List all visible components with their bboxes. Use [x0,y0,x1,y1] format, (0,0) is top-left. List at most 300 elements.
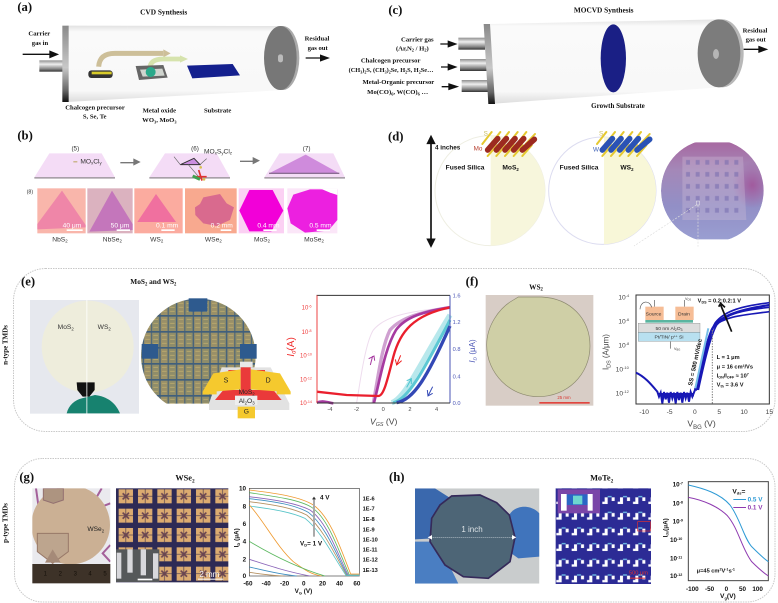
chart: Ids vs Vg: = [741,488,745,495]
label: residual gas out: gas out [308,45,329,52]
label: residual gas out [743,27,768,43]
chart: Id vs Vgs [286,295,450,428]
step 6 substrate: Cl [224,148,230,155]
chart: Ids vs Vg: s [729,568,732,574]
wafer with device array [634,139,772,247]
arrow: carrier gas in [23,51,57,57]
chart: Ids vs Vg: 10 [670,555,677,562]
chart: Id vs Vgs: (V) [383,417,398,427]
step 5 substrate: x [91,161,94,166]
chart: Ids vs Vbg: (A/μm) [602,334,611,360]
label: carrier gas: Carrier gas [401,36,434,43]
wafer photo with ruler: WSe [87,526,102,533]
chart: Ids vs Vbg: th [720,385,724,389]
device array with SEM inset [116,488,228,582]
label: metal-organic precursor: , W(CO) [393,89,418,96]
chart: Ids vs Vg: 0.1 V [748,504,763,511]
chart: Id vs Vg: 8 [243,503,247,510]
step 6 substrate: y [221,151,224,156]
chart: Ids vs Vbg: = 0.2:0.2:1 V [707,299,741,305]
chart: Ids vs Vbg: OFF [727,375,735,379]
chart: Id vs Vg: 10 [239,486,247,493]
chart: Ids vs Vg: 10 [670,537,677,544]
heading: CVD Synthesis: CVD Synthesis [140,7,187,16]
crystal WS2: 0.1 mm [156,222,179,229]
chart: Ids vs Vg: -1 [725,567,729,571]
step 6 substrate: MO [204,148,215,155]
label (c): (c) [388,3,402,17]
wafer labels: MoS [502,165,516,172]
label: carrier gas in [28,30,50,47]
step 6 substrate: z [230,151,232,156]
label: chalcogen precursor [65,105,125,121]
chart: Ids vs Vg: 50 [739,586,747,593]
chart: Id vs Vgs: d [291,350,297,354]
wafer labels: WS [620,165,631,172]
label: metal-organic precursor: Mo(CO) [367,89,391,96]
chart: Id vs Vgs: -14 [307,400,312,404]
wafer photo with glove: 2 [71,326,74,331]
chart: Ids vs Vg: 10 [673,500,680,507]
panel (g): WSe2 [19,470,378,595]
chart: Id vs Vg: 0 [243,573,247,580]
heading: MoS2 and WS2: and WS [147,277,174,286]
chart: Id vs Vgs: -10 [307,353,312,357]
wafer photo with scale bar [486,295,593,406]
chart: Id vs Vg: (V) [302,588,312,595]
chart: Ids vs Vbg: DS [606,360,612,368]
chart: Id vs Vgs: -2 [354,407,359,413]
chart: Ids vs Vbg: V [674,347,676,351]
label: substrate: Substrate [204,107,231,114]
heading: MoS2 and WS2: 2 [145,282,148,287]
chart: Ids vs Vg: -7 [680,482,683,486]
chart: Id vs Vg: 1E-11 [363,548,377,554]
chart: Ids vs Vbg: SS = 580 mV/dec [688,338,704,386]
label: metal oxide: , MoO [156,117,174,124]
right axis labels for chart e: 1.6 [453,293,461,299]
crystal labels: WSe [205,236,219,243]
chart: Ids vs Vbg: I [602,368,611,370]
step 5 substrate [34,145,115,179]
label: chalcogen precursor: 2 [364,69,366,74]
chart: Ids vs Vg: 0.5 V [748,497,763,504]
wafer labels: 2 [631,167,634,172]
chart: Ids vs Vg: 100 [752,586,763,593]
chart: Ids vs Vbg: ON [718,375,724,379]
heading: WSe2: WSe [175,474,192,483]
wafer photo with gloves: 1 inch [461,525,483,534]
wafer photo with ruler: 3 [74,571,78,577]
crystal MoSe2 [287,188,337,233]
heading: MOCVD Synthesis: MOCVD Synthesis [574,6,634,15]
right axis labels for chart e [453,293,478,407]
wafer photo with ruler [31,486,110,583]
chart: Id vs Vgs: (A) [286,337,297,351]
label (f): (f) [466,275,478,289]
chart: Id vs Vgs: V [370,417,376,427]
label (e): (e) [21,275,35,289]
crystal labels: MoSe [304,236,321,243]
chart: Ids vs Vbg: ++ [674,334,678,338]
wafer photo with ruler: 5 [103,571,107,577]
label: chalcogen precursor: Se… [421,67,433,74]
crystal labels: MoS [254,236,268,243]
right axis labels for chart e: 0.8 [453,347,461,353]
heading: MoTe2: MoTe [590,474,611,483]
chart: Ids vs Vbg: -10 [623,365,630,370]
device array with inset [556,488,651,584]
label (a): (a) [17,0,32,14]
wafer photo with ruler: 2 [59,571,63,577]
wafer photo with glove: MoS [58,324,71,331]
chart: Id vs Vg: 40 [336,580,344,587]
tube end disk [264,26,299,90]
label: chalcogen precursor: Chalcogen precursor [361,58,421,65]
transistor schematic: G [244,409,249,416]
label: chalcogen precursor: ) [362,67,364,74]
label: carrier gas: (Ar,N [396,45,412,52]
label: metal-organic precursor [362,79,434,96]
chart: Ids vs Vbg [602,293,773,431]
panel (a): CVD synthesis [17,0,330,124]
crystal labels: NbS [52,236,65,243]
right axis labels for chart e: 1.2 [453,320,461,326]
wafer photo with glove: 2 [108,326,111,331]
side label: n-type TMDs: n-type TMDs [2,325,10,365]
chart: Id vs Vg: 4 [243,539,247,546]
transistor schematic: 2 [252,391,255,396]
chart: Ids vs Vbg: V [685,297,687,301]
tube end flange [62,26,69,102]
label: chalcogen precursor: Chalcogen precursor [65,105,125,112]
label: chalcogen precursor: (CH [349,67,360,74]
chart: Id vs Vg: 4 V [320,494,330,501]
label: metal-organic precursor: 6 [391,91,394,96]
chart: Ids vs Vg: ds [665,530,670,536]
chart: Ids vs Vbg: BG [693,425,702,431]
chart: Id vs Vg: 1E-12 [363,558,378,564]
chart: Ids vs Vbg: V [687,419,693,429]
chart: Ids vs Vbg: V [698,299,701,305]
panel (h): MoTe2 [389,470,768,600]
arrow: 4 inches [428,137,434,246]
chart: Ids vs Vbg: μ = 16 cm²/Vs [717,363,753,370]
device array with inset: 500 μm [629,570,648,576]
label: carrier gas: ) [426,45,429,52]
chart: Ids vs Vbg: 10 [618,294,626,301]
chart: Id vs Vg: 1E-8 [363,517,375,523]
chart: Ids vs Vbg: O [677,326,681,332]
label: chalcogen precursor: S, H [407,67,419,74]
crystal NbS2: 40 μm [63,222,82,229]
crystal MoS2 [239,188,284,233]
chart: Id vs Vgs: 10 [300,378,307,384]
chart: Id vs Vg: = 1 V [307,540,323,547]
panel (d): wafer-scale films [388,130,772,247]
label: metal-organic precursor: Metal-Organic precursor [362,79,434,86]
crystal WSe2: 0.2 mm [211,222,233,229]
label: metal oxide: 3 [174,119,177,124]
lattice atom labels: Mo [474,145,483,152]
chart: Id vs Vg: 1E-6 [363,496,375,502]
crystal NbSe2: 50 μm [111,222,130,229]
chart: Id vs Vgs: -8 [308,329,312,333]
heading: WS2: 2 [541,288,544,293]
chart: Id vs Vgs: -6 [308,305,312,309]
label: chalcogen precursor: S, Se, Te [83,114,107,121]
chart: Ids vs Vbg: Pt/TiN/ p [655,335,674,341]
chart: Id vs Vg: 20 [319,580,327,587]
chart: Ids vs Vbg: 7 [747,373,749,377]
chart: Id vs Vg: -60 [243,580,253,587]
lattice atom labels: S [484,130,488,137]
oxide flow arrow [150,59,180,68]
arrow 2 [240,157,260,164]
step 7 substrate [264,145,345,179]
chart: Id vs Vg: 1E-10 [363,537,378,543]
wafer photo with ruler: 1 [44,571,48,577]
label: carrier gas: 2 [424,48,426,53]
crystal labels: 2 [268,239,271,244]
step 5 substrate: MO [80,158,91,165]
label: growth substrate: Growth Substrate [591,102,645,110]
chart: Ids vs Vg: -50 [705,586,715,593]
chart: Id vs Vgs: 0 [382,407,385,413]
tube end disk [698,19,744,87]
label: carrier gas in: Carrier [28,30,50,37]
step 6 substrate: x [215,151,218,156]
chart: Ids vs Vbg: L = 1 μm [717,355,740,361]
step 6 substrate: (6) [191,145,199,152]
label: carrier gas [396,36,434,53]
MoS2 crystal lattice [482,132,535,156]
right axis labels for chart e: 0.0 [453,401,461,407]
label: chalcogen precursor: 3 [385,69,387,74]
chart: Id vs Vgs: 10 [302,330,308,336]
transistor schematic: S [224,377,229,384]
chart: Id vs Vgs: 10 [300,401,307,407]
chart: Ids vs Vg: 2 [719,567,722,571]
step 6 substrate [149,145,232,181]
chart: Id vs Vg: 1E-9 [363,527,375,533]
crystal labels: WS [150,236,161,243]
chart: Ids vs Vbg: 10 [618,318,626,325]
chart: Ids vs Vg: 10 [670,573,677,580]
label: 4 inches: 4 inches [435,145,461,152]
chart: Ids vs Vbg: 50 nm Al [655,326,675,332]
chart: Ids vs Vbg: 15 [766,409,773,416]
arrow 1 [120,158,141,166]
wafer labels: Fused Silica [560,165,599,172]
chart: Ids vs Vg: V [720,593,724,600]
tube body [67,26,283,102]
wafer labels [446,165,634,172]
chart: Ids vs Vg: g [724,595,727,600]
chart: Id vs Vgs: I [286,354,297,357]
label: carrier gas in: gas in [32,40,49,47]
label (h): (h) [389,470,404,484]
chart: Ids vs Vbg: -4 [626,293,630,298]
chart: Id vs Vg: G [299,590,302,595]
transistor schematic: O [247,398,252,405]
crystal labels: 2 [161,239,164,244]
label: chalcogen precursor: 2 [405,69,407,74]
chart: Ids vs Vg [662,482,768,600]
label: carrier gas: / H [414,45,425,52]
transistor schematic: Al [239,398,245,405]
label: metal oxide: Metal oxide [143,107,176,114]
transistor schematic: 2 [245,400,248,405]
crystal labels: 2 [321,239,324,244]
label (g): (g) [19,470,34,484]
label: chalcogen precursor: Se, H [391,67,405,74]
chart: Id vs Vg: 0 [302,580,306,587]
crystal NbS2 [37,188,86,233]
arrow: residual gas out [744,47,766,52]
chart: Id vs Vg: -40 [262,580,271,587]
chart: Ids vs Vbg: BG [676,348,680,352]
panel (b): growth mechanism and crystals [17,129,345,244]
panel (g) and (h) frame: p-type TMDs [14,458,775,602]
chart: Ids vs Vbg: 10 [618,342,626,349]
chart: Ids vs Vbg: 3 [681,328,683,332]
chart: Ids vs Vbg: Drain [678,312,690,318]
chart: Id vs Vg: V [300,540,304,547]
chart: Ids vs Vbg: 2 [675,328,677,332]
chart: Ids vs Vbg: 10 [616,366,623,373]
label: metal-organic precursor: 6 [418,91,421,96]
chart: Ids vs Vg: V [732,488,737,495]
label: metal oxide [142,107,177,124]
crystal labels: NbSe [103,236,119,243]
wafer labels: Fused Silica [446,165,485,172]
label: metal oxide: WO [142,117,154,124]
chart: Ids vs Vbg: -10 [639,409,649,416]
chart: Id vs Vgs: -4 [327,407,332,413]
chart: Ids vs Vg: -100 [686,586,699,593]
chart: Id vs Vgs: 10 [302,306,308,312]
panel (c): MOCVD synthesis [349,3,768,110]
chart: Id vs Vg: I [234,546,241,547]
chart: Ids vs Vg: V [722,568,726,574]
crystal labels [52,236,324,244]
heading: MoS2 and WS2: MoS [130,277,145,286]
wafer photo with ruler: 2 [102,528,105,533]
crystal labels: 2 [65,239,68,244]
label: chalcogen precursor: 2 [389,69,391,74]
step 6 substrate: S [217,148,222,155]
substrate [187,64,240,78]
label: chalcogen precursor: ) [387,67,389,74]
wafer WS2 [549,137,656,244]
chart: Id vs Vgs: 10 [300,354,307,360]
chart: Ids vs Vbg: -8 [626,341,630,346]
chart: Ids vs Vg: 0 [725,586,729,593]
chart: Ids vs Vbg: -12 [623,389,630,394]
tube end flange [484,24,495,104]
label: carrier gas: 2 [412,48,414,53]
step 5 substrate: y [100,161,103,166]
step 5 substrate: (5) [71,145,79,152]
crystal WS2 [134,188,183,233]
inlet ports [458,38,489,92]
crystal MoSe2: 0.5 mm [309,222,332,229]
chart: Id vs Vgs: -12 [307,377,312,381]
chart: Ids vs Vbg: V [717,383,720,389]
chart: Ids vs Vg: -9 [680,519,683,523]
chart: Ids vs Vbg: I [717,373,718,379]
chart: Ids vs Vbg: Source [646,312,662,318]
chart: Ids vs Vbg: -5 [667,409,673,416]
label (d): (d) [388,130,403,144]
chart: Ids vs Vbg: Si [678,335,683,341]
chart: Ids vs Vg: -11 [677,555,682,559]
chart: Ids vs Vbg: 0 [693,409,697,416]
chalcogen boat [88,70,113,78]
chart: Id vs Vgs: 4 [435,407,438,413]
chart: Id vs Vg: V [295,588,299,595]
label: residual gas out: Residual [305,36,330,43]
metal oxide boat [136,65,168,80]
chart: Id vs Vg: 6 [243,521,247,528]
step 5 substrate: Cl [93,158,100,165]
chart: Ids vs Vbg: DS [701,301,707,305]
chart: Ids vs Vbg: -6 [626,317,630,322]
transistor schematic: D [266,377,271,384]
lattice atom labels: S [599,130,603,137]
chart: Id vs Vg: 2 [243,556,247,563]
label (b): (b) [17,129,33,143]
chart: Ids vs Vg: μ=45 cm [697,568,719,574]
panel (f): WS2 [453,275,773,431]
device array with SEM inset: 2 mm [199,570,220,579]
wafer photo with glove [30,300,139,414]
chart: Ids vs Vg: I [662,536,669,537]
right axis labels for chart e: 0.4 [453,374,461,380]
chart: Ids vs Vg: 10 [673,519,680,526]
right axis labels for chart e: I [468,360,477,363]
chart: Id vs Vg: D [236,543,241,546]
heading: WSe2: 2 [192,478,195,484]
chart: Ids vs Vbg: DS [687,298,691,302]
tube body [489,19,719,104]
heading: MoS2 and WS2: 2 [174,282,177,287]
panel (e) and (f) frame: n-type TMDs [14,268,775,432]
wafer with transistor arrays [141,298,257,413]
chart: Id vs Vg: -20 [280,580,290,587]
crystal labels: 2 [219,239,222,244]
chart: Ids vs Vg: ds [737,491,742,496]
wafer photo with gloves [415,488,539,584]
side label: p-type TMDs: p-type TMDs [2,503,10,543]
label: residual gas out: gas out [746,36,767,43]
panel (e): MoS2 and WS2 [21,275,450,428]
crystal NbSe2 [87,188,133,233]
right axis labels for chart e: (μA) [468,339,477,357]
chart: Id vs Vg: 1E-13 [363,568,378,574]
oxide arrow head [180,55,188,63]
transistor schematic [203,362,291,418]
chart: Id vs Vg: 1E-7 [363,507,375,513]
wafer labels: 2 [516,167,519,172]
label: residual gas out: Residual [743,27,768,34]
step 7 substrate: (7) [303,145,311,152]
wafer photo with glove: WS [98,324,108,331]
chart: Id vs Vg: (μA) [234,528,241,543]
wafer MoS2 [435,136,545,246]
growth substrate [601,24,626,92]
